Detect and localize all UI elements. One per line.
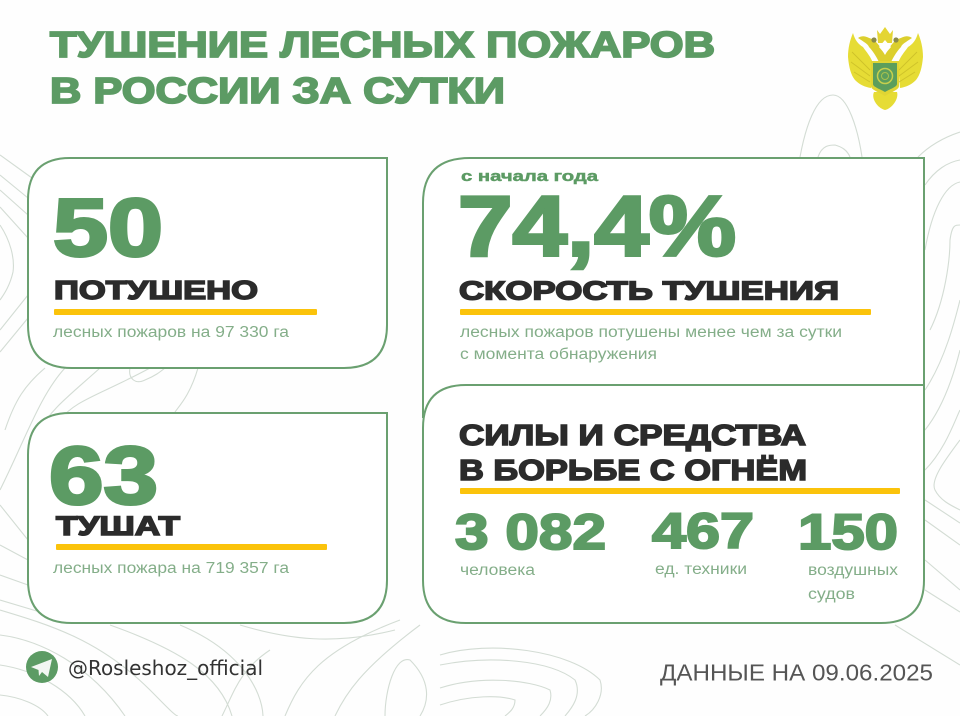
heading: extinguished: ПОТУШЕНО: [54, 275, 258, 305]
title: В РОССИИ ЗА СУТКИ: [50, 70, 505, 111]
yellow underline: [460, 488, 900, 494]
heading: extinguishing: ТУШАТ: [56, 511, 181, 541]
caption: лесных пожара на 719 357 га: [53, 560, 289, 577]
number: 50: 50: [53, 182, 163, 274]
number: 63: 63: [49, 430, 158, 522]
panel: forces and means: [423, 385, 924, 623]
stat: people: 3 082: [455, 504, 606, 560]
heading: forces: [459, 420, 807, 487]
panel: speed: с момента обнаружения: [460, 346, 657, 363]
yellow underline: [460, 309, 871, 315]
panel: being extinguished: [28, 413, 387, 623]
title: [50, 24, 715, 111]
title: ТУШЕНИЕ ЛЕСНЫХ ПОЖАРОВ: [50, 24, 715, 65]
stat: people: человека: [460, 562, 535, 579]
telegram handle: [26, 651, 263, 683]
stat: people: [455, 504, 606, 579]
stat: aircraft: судов: [808, 586, 855, 603]
stat: aircraft: [798, 504, 898, 603]
panel: extinguished: [28, 158, 387, 368]
heading: forces: СИЛЫ И СРЕДСТВА: [459, 420, 806, 452]
caption: лесных пожаров на 97 330 га: [53, 324, 289, 341]
stat: vehicles: ед. техники: [655, 561, 747, 578]
yellow underline: [56, 544, 327, 550]
icon: coat of arms emblem: [848, 27, 923, 110]
caption: лесных пожаров потушены менее чем за сутки: [460, 324, 842, 341]
label: since start of year: с начала года: [461, 169, 599, 185]
data date: ДАННЫЕ НА 09.06.2025: [660, 660, 933, 686]
telegram handle: @Rosleshoz_official: [68, 656, 263, 680]
heading: forces: В БОРЬБЕ С ОГНЁМ: [459, 454, 807, 487]
stat: vehicles: 467: [652, 503, 754, 559]
stat: vehicles: [652, 503, 754, 578]
yellow underline: [54, 309, 317, 315]
stat: aircraft: 150: [798, 504, 898, 560]
stat: aircraft: воздушных: [808, 562, 898, 579]
panel: speed: [423, 158, 924, 418]
heading: speed: СКОРОСТЬ ТУШЕНИЯ: [459, 276, 839, 306]
number: 74,4%: 74,4%: [458, 180, 736, 274]
icon: telegram: [26, 651, 58, 683]
